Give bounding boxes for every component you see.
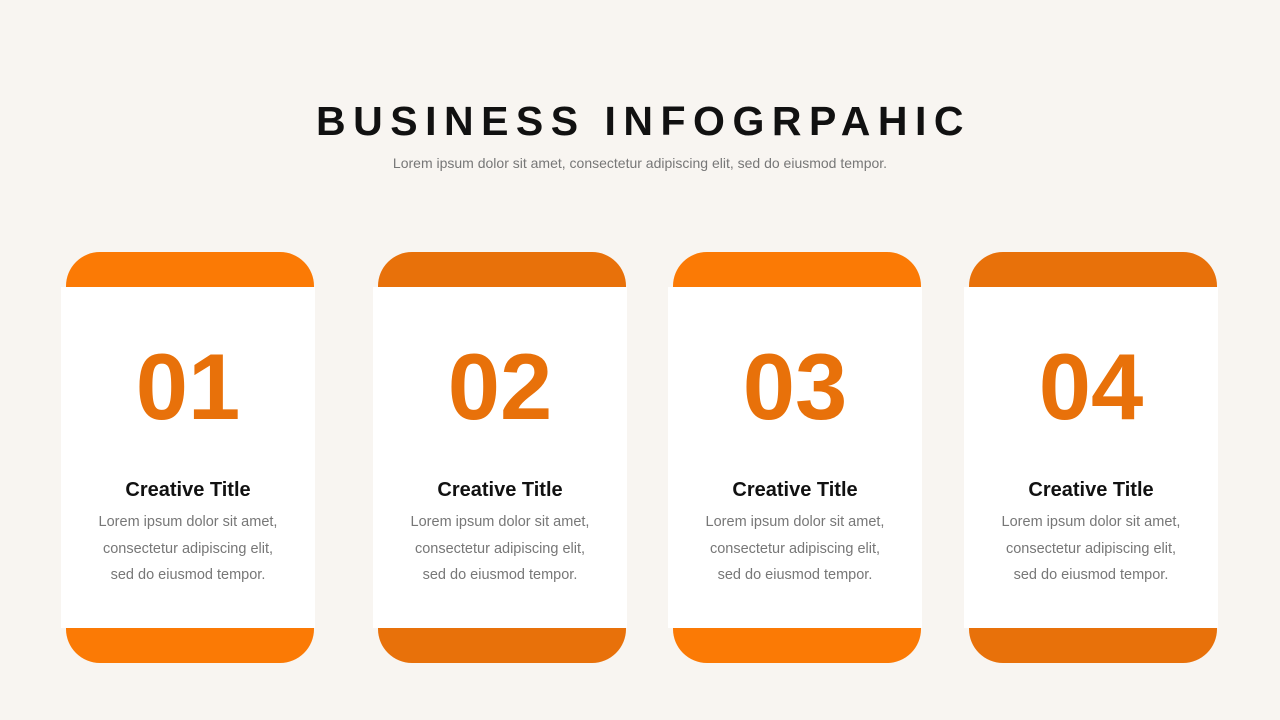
card text 3: consectetur adipiscing elit, (710, 540, 880, 556)
card text 4: consectetur adipiscing elit, (1006, 540, 1176, 556)
number 04: 04 (1039, 334, 1143, 439)
card title 1: Creative Title (125, 479, 251, 501)
subtitle: Lorem ipsum dolor sit amet, consectetur adipiscing elit, sed do eiusmod tempor. (393, 155, 887, 171)
title: BUSINESS INFOGRPAHIC (316, 98, 971, 144)
card text 2: Lorem ipsum dolor sit amet, (411, 514, 589, 530)
card text 1 (99, 514, 277, 583)
card title 2: Creative Title (437, 479, 563, 501)
card title 4: Creative Title (1028, 479, 1154, 501)
card 04 (964, 252, 1218, 663)
card 01 (61, 252, 315, 663)
card text 4: sed do eiusmod tempor. (1014, 567, 1168, 583)
card title 3: Creative Title (732, 479, 858, 501)
card text 1: consectetur adipiscing elit, (103, 540, 273, 556)
card text 2 (411, 514, 589, 583)
number 03: 03 (743, 334, 847, 439)
number 02: 02 (448, 334, 552, 439)
card text 3: sed do eiusmod tempor. (718, 567, 872, 583)
card text 1: Lorem ipsum dolor sit amet, (99, 514, 277, 530)
card text 2: consectetur adipiscing elit, (415, 540, 585, 556)
card text 4: Lorem ipsum dolor sit amet, (1002, 514, 1180, 530)
card text 4 (1002, 514, 1180, 583)
card 02 (373, 252, 627, 663)
card text 3 (706, 514, 884, 583)
number 01: 01 (136, 334, 240, 439)
card text 3: Lorem ipsum dolor sit amet, (706, 514, 884, 530)
card text 2: sed do eiusmod tempor. (423, 567, 577, 583)
card text 1: sed do eiusmod tempor. (111, 567, 265, 583)
card 03 (668, 252, 922, 663)
